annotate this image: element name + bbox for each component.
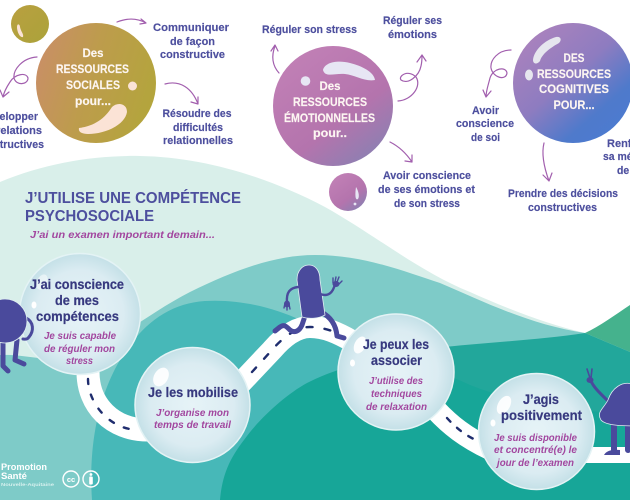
logo: Promotion Santé: Promotion xyxy=(1,462,47,473)
label: conscience de soi: de soi xyxy=(471,132,500,144)
label: conscience de soi xyxy=(456,105,514,144)
label: prendre des décisions xyxy=(508,188,618,214)
character: victory figure xyxy=(586,369,630,455)
label: communiquer: Communiquer xyxy=(153,22,230,34)
background: light teal hill xyxy=(0,255,630,500)
heading: J’UTILISE UNE COMPÉTENCE xyxy=(25,190,241,207)
arrow: résoudre xyxy=(165,83,198,104)
arrow: régulation stress xyxy=(271,45,279,73)
logo: Promotion Santé: Santé xyxy=(1,471,27,482)
label: avoir conscience émotions: de ses émotions et xyxy=(378,184,475,196)
label: résoudre: Résoudre des xyxy=(162,108,232,120)
bubble: ressources émotionnelles: RESSOURCES xyxy=(293,97,367,109)
small bubble: social xyxy=(11,5,49,43)
bubble: ressources émotionnelles: ÉMOTIONNELLES xyxy=(284,112,375,125)
bubble: ressources cognitives xyxy=(513,23,630,143)
step bubble 1: conscience: de mes xyxy=(55,293,99,308)
bubble: ressources sociales: SOCIALES xyxy=(66,80,120,92)
character: left figure xyxy=(0,299,32,371)
bubble: ressources émotionnelles: pour.. xyxy=(313,128,347,140)
bubble: ressources cognitives: RESSOURCES xyxy=(537,69,611,81)
step bubble 4: agis: jour de l’examen xyxy=(495,458,574,469)
arrow: conscience xyxy=(390,142,412,162)
heading xyxy=(25,190,241,225)
step bubble 4: agis: Je suis disponible xyxy=(494,433,578,444)
icon: creative commons xyxy=(63,471,99,487)
label: prendre des décisions: Prendre des décisions xyxy=(508,188,618,200)
subheading: J’ai un examen important demain... xyxy=(30,230,215,241)
step bubble 4: agis xyxy=(478,374,594,490)
bubble: ressources sociales xyxy=(36,23,156,143)
arrow: décisions xyxy=(543,143,552,181)
step bubble 2: mobilise: J’organise mon xyxy=(156,408,229,419)
arrow: avoir conscience de soi xyxy=(483,50,511,97)
bubble: ressources cognitives: POUR... xyxy=(554,100,594,112)
label: réguler ses émotions: émotions xyxy=(388,29,437,41)
label: conscience de soi: conscience xyxy=(456,118,514,130)
background: dark teal band xyxy=(396,333,630,500)
bubble: ressources sociales: Des xyxy=(82,48,104,60)
step bubble 1: conscience: J’ai conscience xyxy=(30,277,124,292)
small bubble: émotions xyxy=(329,173,367,211)
arrow: communiquer xyxy=(117,19,146,24)
bubble: ressources émotionnelles xyxy=(273,46,393,166)
logo: Promotion Santé: Nouvelle-Aquitaine xyxy=(1,482,55,487)
step bubble 2: mobilise: temps de travail xyxy=(154,420,231,431)
label: avoir conscience émotions: Avoir conscience xyxy=(383,170,471,182)
winding road xyxy=(88,327,630,463)
label: développer xyxy=(0,111,44,151)
step bubble 1: conscience: stress xyxy=(66,356,94,367)
step bubble 2: mobilise: Je les mobilise xyxy=(148,385,238,400)
step bubble 3: associer: associer xyxy=(371,353,423,368)
bubble: ressources cognitives: COGNITIVES xyxy=(539,84,609,96)
bubble: ressources sociales: RESSOURCES xyxy=(56,64,129,76)
step bubble 4: agis: positivement xyxy=(501,408,582,423)
logo: Promotion Santé xyxy=(1,462,55,487)
label: communiquer: constructive xyxy=(160,49,225,61)
icon: creative commons: cc xyxy=(67,475,75,484)
label: avoir conscience émotions: de son stress xyxy=(394,198,460,210)
label: renforcer sa mémoire xyxy=(603,138,630,177)
step bubble 3: associer: techniques xyxy=(371,389,423,400)
character: running figure xyxy=(275,265,344,338)
step bubble 2: mobilise xyxy=(135,348,250,462)
step bubble 1: conscience: de réguler mon xyxy=(44,344,115,355)
label: conscience de soi: Avoir xyxy=(472,105,500,117)
arrow: développer xyxy=(0,57,37,97)
heading: PSYCHOSOCIALE xyxy=(25,208,154,225)
step bubble 4: agis: et concentré(e) le xyxy=(494,445,578,456)
bubble: ressources cognitives: DES xyxy=(564,53,585,65)
label: résoudre: difficultés xyxy=(173,122,223,134)
background: dark teal foreground hill xyxy=(220,364,630,500)
arrow: régulation émotions xyxy=(398,55,426,101)
step bubble 1: conscience: compétences xyxy=(36,309,119,324)
bubble: ressources sociales: pour... xyxy=(75,96,111,108)
label: communiquer: de façon xyxy=(170,36,215,48)
step bubble 1: conscience: Je suis capable xyxy=(44,331,117,342)
label: résoudre xyxy=(162,108,233,147)
step bubble 1: conscience xyxy=(20,254,140,374)
label: communiquer xyxy=(153,22,230,61)
label: avoir conscience émotions xyxy=(378,170,475,210)
bubble: ressources émotionnelles: Des xyxy=(320,81,340,93)
background: pale mint hill xyxy=(0,156,585,500)
label: réguler son stress: Réguler son stress xyxy=(262,24,357,36)
label: résoudre: relationnelles xyxy=(163,135,233,147)
label: prendre des décisions: constructives xyxy=(528,202,597,214)
step bubble 3: associer xyxy=(338,314,454,430)
step bubble 3: associer: de relaxation xyxy=(366,402,427,413)
label: réguler ses émotions xyxy=(383,15,442,41)
background: green hill xyxy=(585,305,630,352)
step bubble 3: associer: J’utilise des xyxy=(369,376,424,387)
background: medium teal hill xyxy=(91,301,400,500)
step bubble 3: associer: Je peux les xyxy=(363,337,429,352)
label: réguler ses émotions: Réguler ses xyxy=(383,15,442,27)
step bubble 4: agis: J’agis xyxy=(523,392,559,407)
